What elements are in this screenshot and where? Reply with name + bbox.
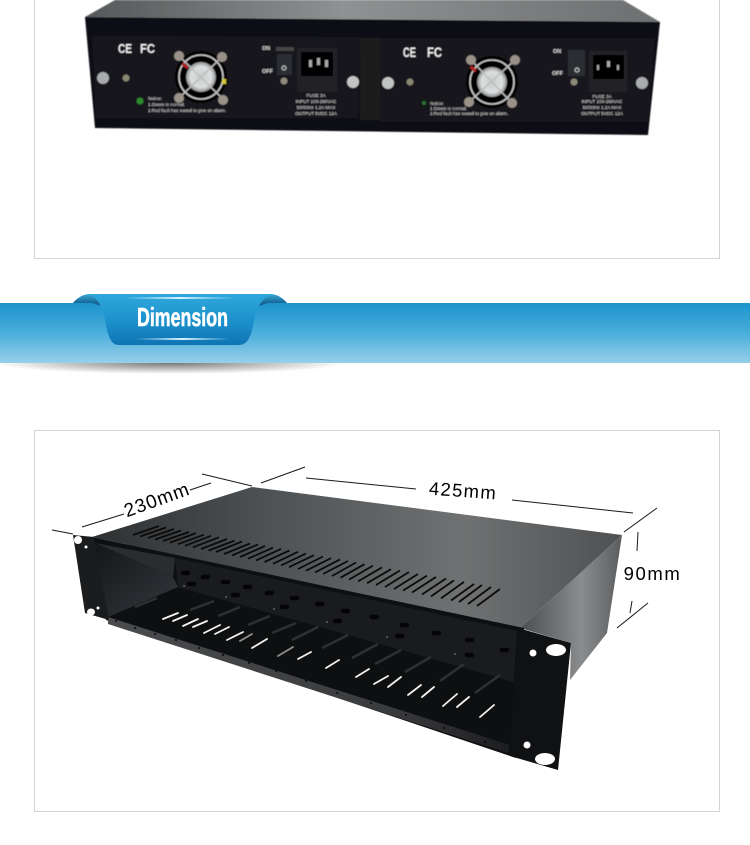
indicator dot right [406, 78, 414, 86]
connectors on back wall [183, 573, 507, 655]
notice text left: Notice: [148, 96, 162, 101]
bright floor slots [163, 613, 494, 717]
notice text right: Notice: [430, 101, 444, 106]
power rating label left: 50/60Hz 1.2A MAX [297, 105, 335, 110]
power switch left: OFF [262, 69, 274, 75]
power rating label right [581, 94, 624, 116]
label: 425mm width: 425mm [428, 478, 498, 503]
power switch right [552, 49, 585, 86]
power switch left [262, 46, 294, 84]
notice text left [136, 96, 226, 113]
mounting screw left [97, 72, 109, 84]
left power module [92, 36, 360, 118]
power rating label right: FUSE 3A [592, 94, 613, 99]
banner title: Dimension [137, 302, 228, 332]
thumb screw centre left [347, 76, 359, 88]
CE FC marks left: FC [140, 41, 156, 56]
mounting screw right [636, 77, 648, 89]
power socket left [297, 48, 337, 92]
fan right [464, 55, 520, 108]
power switch right: ON [553, 49, 561, 55]
power rating label left [295, 93, 338, 116]
chassis side face [520, 535, 622, 680]
left interior upper wall [95, 543, 175, 577]
power rating label left: FUSE 3A [306, 93, 327, 98]
back wall [175, 558, 517, 682]
right power module [380, 38, 655, 122]
CE FC marks left [118, 41, 156, 56]
power rating label right: 50/60Hz 1.2A MAX [583, 105, 621, 110]
label: 90mm height: 90mm [624, 563, 681, 584]
front opening [92, 537, 524, 758]
power switch right: OFF [552, 71, 564, 77]
ribbon ears [73, 294, 287, 306]
connector highlights [184, 586, 455, 654]
thumb screw centre right [382, 77, 394, 89]
dark floor slots [135, 598, 500, 693]
power switch left: ON [262, 46, 270, 52]
left rack ear [73, 535, 109, 620]
notice text right: 2.Red fault has sound to give an alarm. [430, 111, 508, 116]
centre seam between modules [360, 38, 380, 120]
rail screws [116, 621, 485, 742]
CE FC marks right [403, 44, 442, 60]
dimension lines [52, 467, 657, 628]
panel: rear view frame [34, 0, 720, 258]
section banner: Dimension [0, 294, 750, 374]
power rating label left: OUTPUT 5VDC 12A [295, 111, 338, 116]
panel: dimension photo frame [34, 430, 720, 812]
power rating label right: INPUT 100-260VAC [582, 99, 623, 104]
CE FC marks left: CE [118, 41, 132, 56]
right rack ear [510, 628, 571, 770]
CE FC marks right: FC [427, 44, 442, 60]
notice text left: 2.Red fault has sound to give an alarm. [148, 108, 226, 113]
power socket right [589, 51, 627, 92]
power rating label right: OUTPUT 5VDC 12A [581, 111, 624, 116]
ribbon tab [88, 294, 272, 345]
label: 230mm depth: 230mm [121, 479, 193, 522]
notice text right [422, 101, 508, 116]
notice text right: 1.Green is normal. [430, 106, 467, 111]
CE FC marks right: CE [403, 44, 416, 60]
chassis top face [85, 0, 660, 22]
ribbon highlights [125, 297, 235, 299]
blue band [0, 303, 750, 363]
fan left [174, 51, 228, 105]
chassis top face [92, 487, 622, 628]
front rail edge [108, 617, 510, 753]
chassis rear face [85, 17, 660, 135]
top vents [133, 526, 500, 606]
left interior wedge [95, 543, 178, 617]
notice text left: 1.Green is normal. [148, 102, 185, 107]
rear view of chassis [85, 0, 660, 135]
band drop shadow [0, 352, 345, 374]
indicator dot left [122, 74, 130, 82]
power rating label left: INPUT 100-260VAC [296, 99, 337, 104]
chassis photo with measurements [52, 467, 681, 770]
